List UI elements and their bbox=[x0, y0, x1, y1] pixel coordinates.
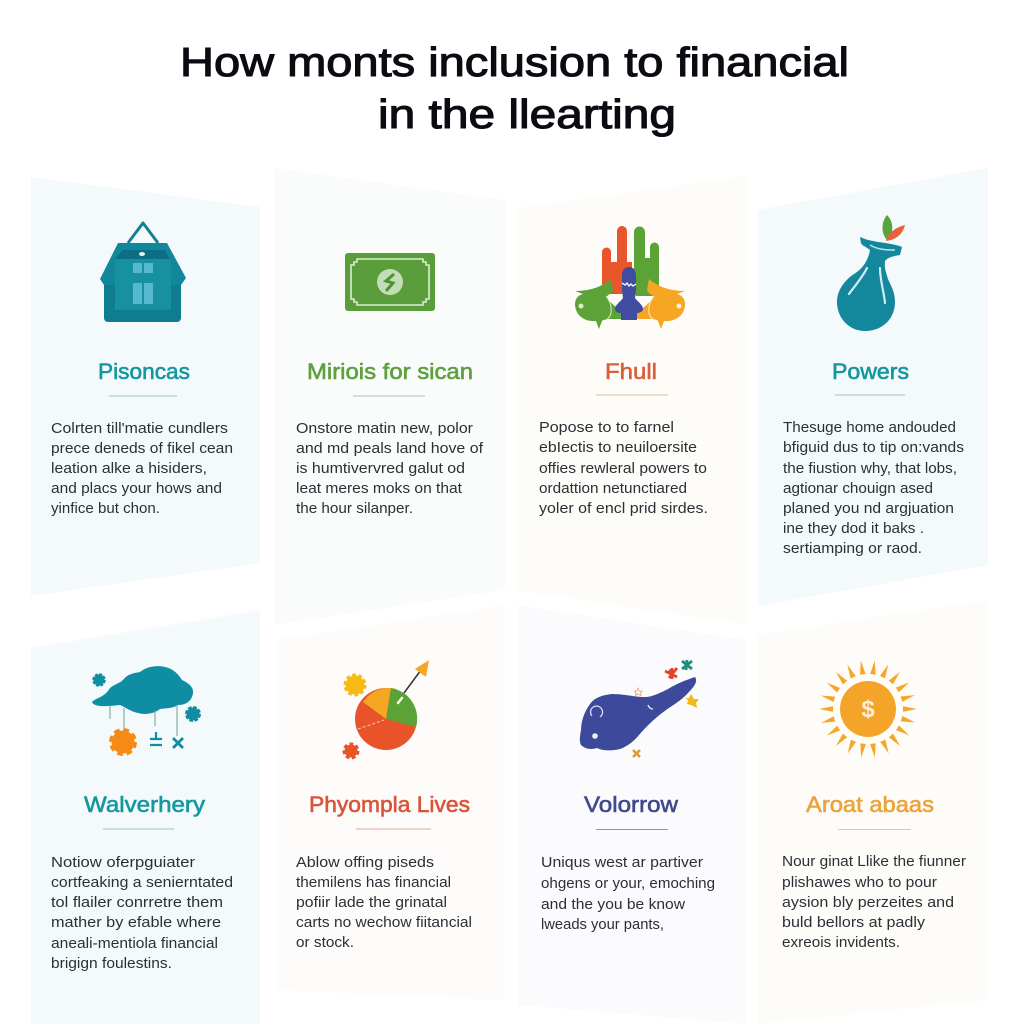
body text: and the you be know bbox=[541, 897, 686, 913]
body text: buld bellors at padly bbox=[782, 915, 926, 931]
divider bbox=[596, 829, 668, 830]
icon: colourful hands and fish bbox=[575, 226, 685, 329]
body text bbox=[51, 855, 233, 972]
panel: Phyompla Lives bbox=[275, 605, 505, 1000]
body text: offies rewleral powers to bbox=[539, 461, 707, 477]
divider bbox=[596, 394, 668, 396]
panel: Pisoncas bbox=[31, 177, 260, 596]
title: in the llearting bbox=[378, 91, 676, 137]
body text: Notiow oferpguiater bbox=[51, 855, 195, 871]
panel: Aroat abaas bbox=[758, 600, 988, 1024]
divider bbox=[835, 394, 905, 396]
body text bbox=[783, 420, 964, 557]
body text bbox=[296, 855, 472, 951]
body text: yoler of encl prid sirdes. bbox=[539, 501, 708, 517]
divider bbox=[353, 396, 425, 397]
body text: sertiamping or raod. bbox=[783, 541, 922, 557]
body text bbox=[782, 854, 966, 951]
panel: Walverhery bbox=[31, 610, 260, 1024]
body text: pofiir lade the grinatal bbox=[296, 895, 447, 911]
body text: plishawes who to pour bbox=[782, 875, 937, 891]
body text: brigign foulestins. bbox=[51, 956, 172, 972]
body text bbox=[296, 421, 484, 517]
icon: teal vase with leaves bbox=[837, 215, 905, 331]
body text bbox=[51, 421, 233, 517]
body text: exreois invidents. bbox=[782, 935, 900, 951]
heading: Aroat abaas bbox=[806, 792, 934, 817]
divider bbox=[838, 829, 911, 830]
heading: Fhull bbox=[605, 359, 657, 384]
divider bbox=[109, 396, 177, 397]
body text bbox=[539, 420, 708, 517]
body text bbox=[541, 855, 715, 933]
body text: Thesuge home andouded bbox=[783, 420, 956, 436]
panel: Fhull bbox=[516, 176, 747, 625]
body text: and md peals land hove of bbox=[296, 441, 484, 457]
body text: Nour ginat Llike the fiunner bbox=[782, 854, 966, 870]
icon: green banknote bbox=[345, 253, 435, 311]
body text: leation alke a hisiders, bbox=[51, 461, 207, 477]
icon: teal house bag bbox=[100, 223, 186, 322]
body text: Ablow offing piseds bbox=[296, 855, 434, 871]
body text: lweads your pants, bbox=[541, 917, 664, 933]
divider bbox=[356, 828, 431, 830]
body text: leat meres moks on that bbox=[296, 481, 462, 497]
body text: Popose to to farnel bbox=[539, 420, 674, 436]
icon: pie chart with arrow bbox=[344, 660, 429, 758]
body text: ine they dod it baks . bbox=[783, 521, 924, 537]
icon: sun with dollar coin bbox=[819, 660, 917, 758]
body text: or stock. bbox=[296, 935, 354, 951]
heading: Walverhery bbox=[84, 792, 205, 817]
body text: agtionar chouign ased bbox=[783, 481, 933, 497]
heading: Miriois for sican bbox=[307, 359, 473, 384]
body text: Uniqus west ar partiver bbox=[541, 855, 703, 871]
body text: aneali-mentiola financial bbox=[51, 936, 218, 952]
heading: Phyompla Lives bbox=[309, 792, 470, 817]
body text: aysion bly perzeites and bbox=[782, 895, 954, 911]
divider bbox=[103, 828, 174, 830]
heading: Powers bbox=[832, 359, 909, 384]
body text: bfiguid dus to tip on:vands bbox=[783, 440, 964, 456]
body text: and placs your hows and bbox=[51, 481, 222, 497]
body text: themilens has financial bbox=[296, 875, 451, 891]
icon: cloud with gears bbox=[92, 666, 200, 754]
title bbox=[180, 39, 849, 137]
heading: Volorrow bbox=[584, 792, 678, 817]
title: How monts inclusion to financial bbox=[180, 39, 849, 85]
body text: planed you nd argjuation bbox=[783, 501, 954, 517]
panel: Volorrow bbox=[518, 605, 746, 1024]
body text: yinfice but chon. bbox=[51, 501, 160, 517]
body text: Colrten till'matie cundlers bbox=[51, 421, 228, 437]
body text: carts no wechow fiitancial bbox=[296, 915, 472, 931]
heading: Pisoncas bbox=[98, 359, 190, 384]
body text: ebIectis to neuiloersite bbox=[539, 440, 697, 456]
body text: ordattion netunctiared bbox=[539, 481, 687, 497]
body text: Onstore matin new, polor bbox=[296, 421, 473, 437]
body text: mather by efable where bbox=[51, 915, 221, 931]
icon: navy whale with stars bbox=[580, 660, 699, 757]
icon: sun with dollar coin: $ bbox=[861, 696, 875, 723]
panel: Powers bbox=[758, 168, 988, 606]
body text: the fiustion why, that lobs, bbox=[783, 461, 957, 477]
body text: ohgens or your, emoching bbox=[541, 876, 715, 892]
body text: cortfeaking a senierntated bbox=[51, 875, 233, 891]
panel: Miriois for sican bbox=[275, 168, 505, 625]
body text: tol flailer conrretre them bbox=[51, 895, 223, 911]
body text: prece deneds of fikel cean bbox=[51, 441, 233, 457]
body text: the hour silanper. bbox=[296, 501, 413, 517]
body text: is humtivervred galut od bbox=[296, 461, 465, 477]
